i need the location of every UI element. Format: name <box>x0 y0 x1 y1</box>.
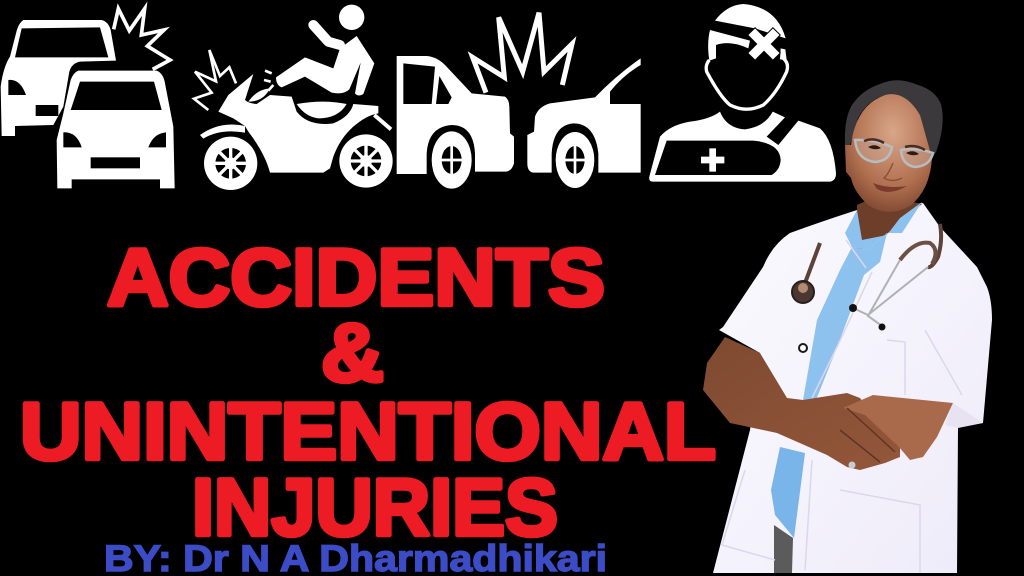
glasses <box>855 140 933 167</box>
title <box>20 233 716 553</box>
finger lines <box>840 408 895 462</box>
neck <box>857 195 922 252</box>
title line: unintentional: UNINTENTIONAL <box>20 387 716 477</box>
title line: accidents: ACCIDENTS <box>107 233 605 323</box>
eyes <box>868 145 919 155</box>
right sleeve cuff <box>945 403 983 428</box>
left arm <box>703 337 900 470</box>
icon: motorcycle crash with rider <box>194 5 393 190</box>
doctor figure <box>703 80 992 573</box>
icon: injured person with bandage and sling <box>649 4 836 182</box>
hair <box>845 80 943 165</box>
nose <box>884 163 902 180</box>
stethoscope <box>792 224 941 330</box>
icon: two cars colliding <box>1 9 175 188</box>
ring <box>848 462 856 468</box>
eyebrows <box>864 139 925 150</box>
icon: two cars rear-end collision <box>397 13 641 189</box>
smile <box>873 183 907 192</box>
coat folds and pockets <box>722 240 962 573</box>
coat button <box>799 344 807 352</box>
right forearm <box>843 395 953 460</box>
title line: ampersand: & <box>321 306 384 399</box>
title line: injuries: INJURIES <box>192 463 558 553</box>
blue shirt collar and placket <box>845 202 922 250</box>
white coat <box>713 203 992 573</box>
head <box>845 94 932 212</box>
dark trousers <box>774 525 793 573</box>
